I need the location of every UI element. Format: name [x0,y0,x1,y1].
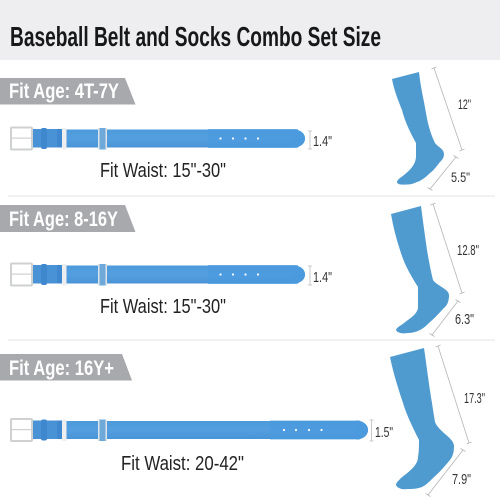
panel: size 16Y+ [0,345,485,496]
age tag: 8-16Y: Fit Age: 8-16Y [9,208,118,231]
sock dimensions: 7.9" [452,471,471,488]
belt width: 1.5 inch [370,420,393,441]
belt width: 1.4 inch: 1.4" [313,133,332,150]
sock dimensions [430,203,479,336]
sock [391,206,449,333]
sock [392,72,444,185]
belt [11,264,305,286]
sock dimensions: 12.8" [457,242,479,259]
sock dimensions: 17.3" [464,390,485,407]
belt width: 1.4 inch [308,131,332,150]
sock dimensions [426,345,485,496]
age tag: 4T-7Y: Fit Age: 4T-7Y [9,80,119,103]
header band [0,0,500,60]
belt [11,419,368,441]
belt width: 1.4 inch [308,266,332,286]
sock dimensions [428,67,471,190]
fit waist text: Fit Waist: 15"-30" [100,160,226,182]
belt width: 1.5 inch: 1.5" [375,424,393,441]
age tag: 16Y+: Fit Age: 16Y+ [9,357,114,380]
fit waist text: Fit Waist: 20-42" [121,453,244,475]
belt [11,128,305,150]
sock dimensions: 6.3" [455,311,474,328]
panel: size 4T-7Y [0,67,471,190]
panel: size 8-16Y [0,203,479,336]
fit waist text: Fit Waist: 15"-30" [100,296,226,318]
belt width: 1.4 inch: 1.4" [313,269,332,286]
sock dimensions: 12" [458,96,471,112]
sock dimensions: 5.5" [451,169,470,185]
sock [390,348,454,489]
